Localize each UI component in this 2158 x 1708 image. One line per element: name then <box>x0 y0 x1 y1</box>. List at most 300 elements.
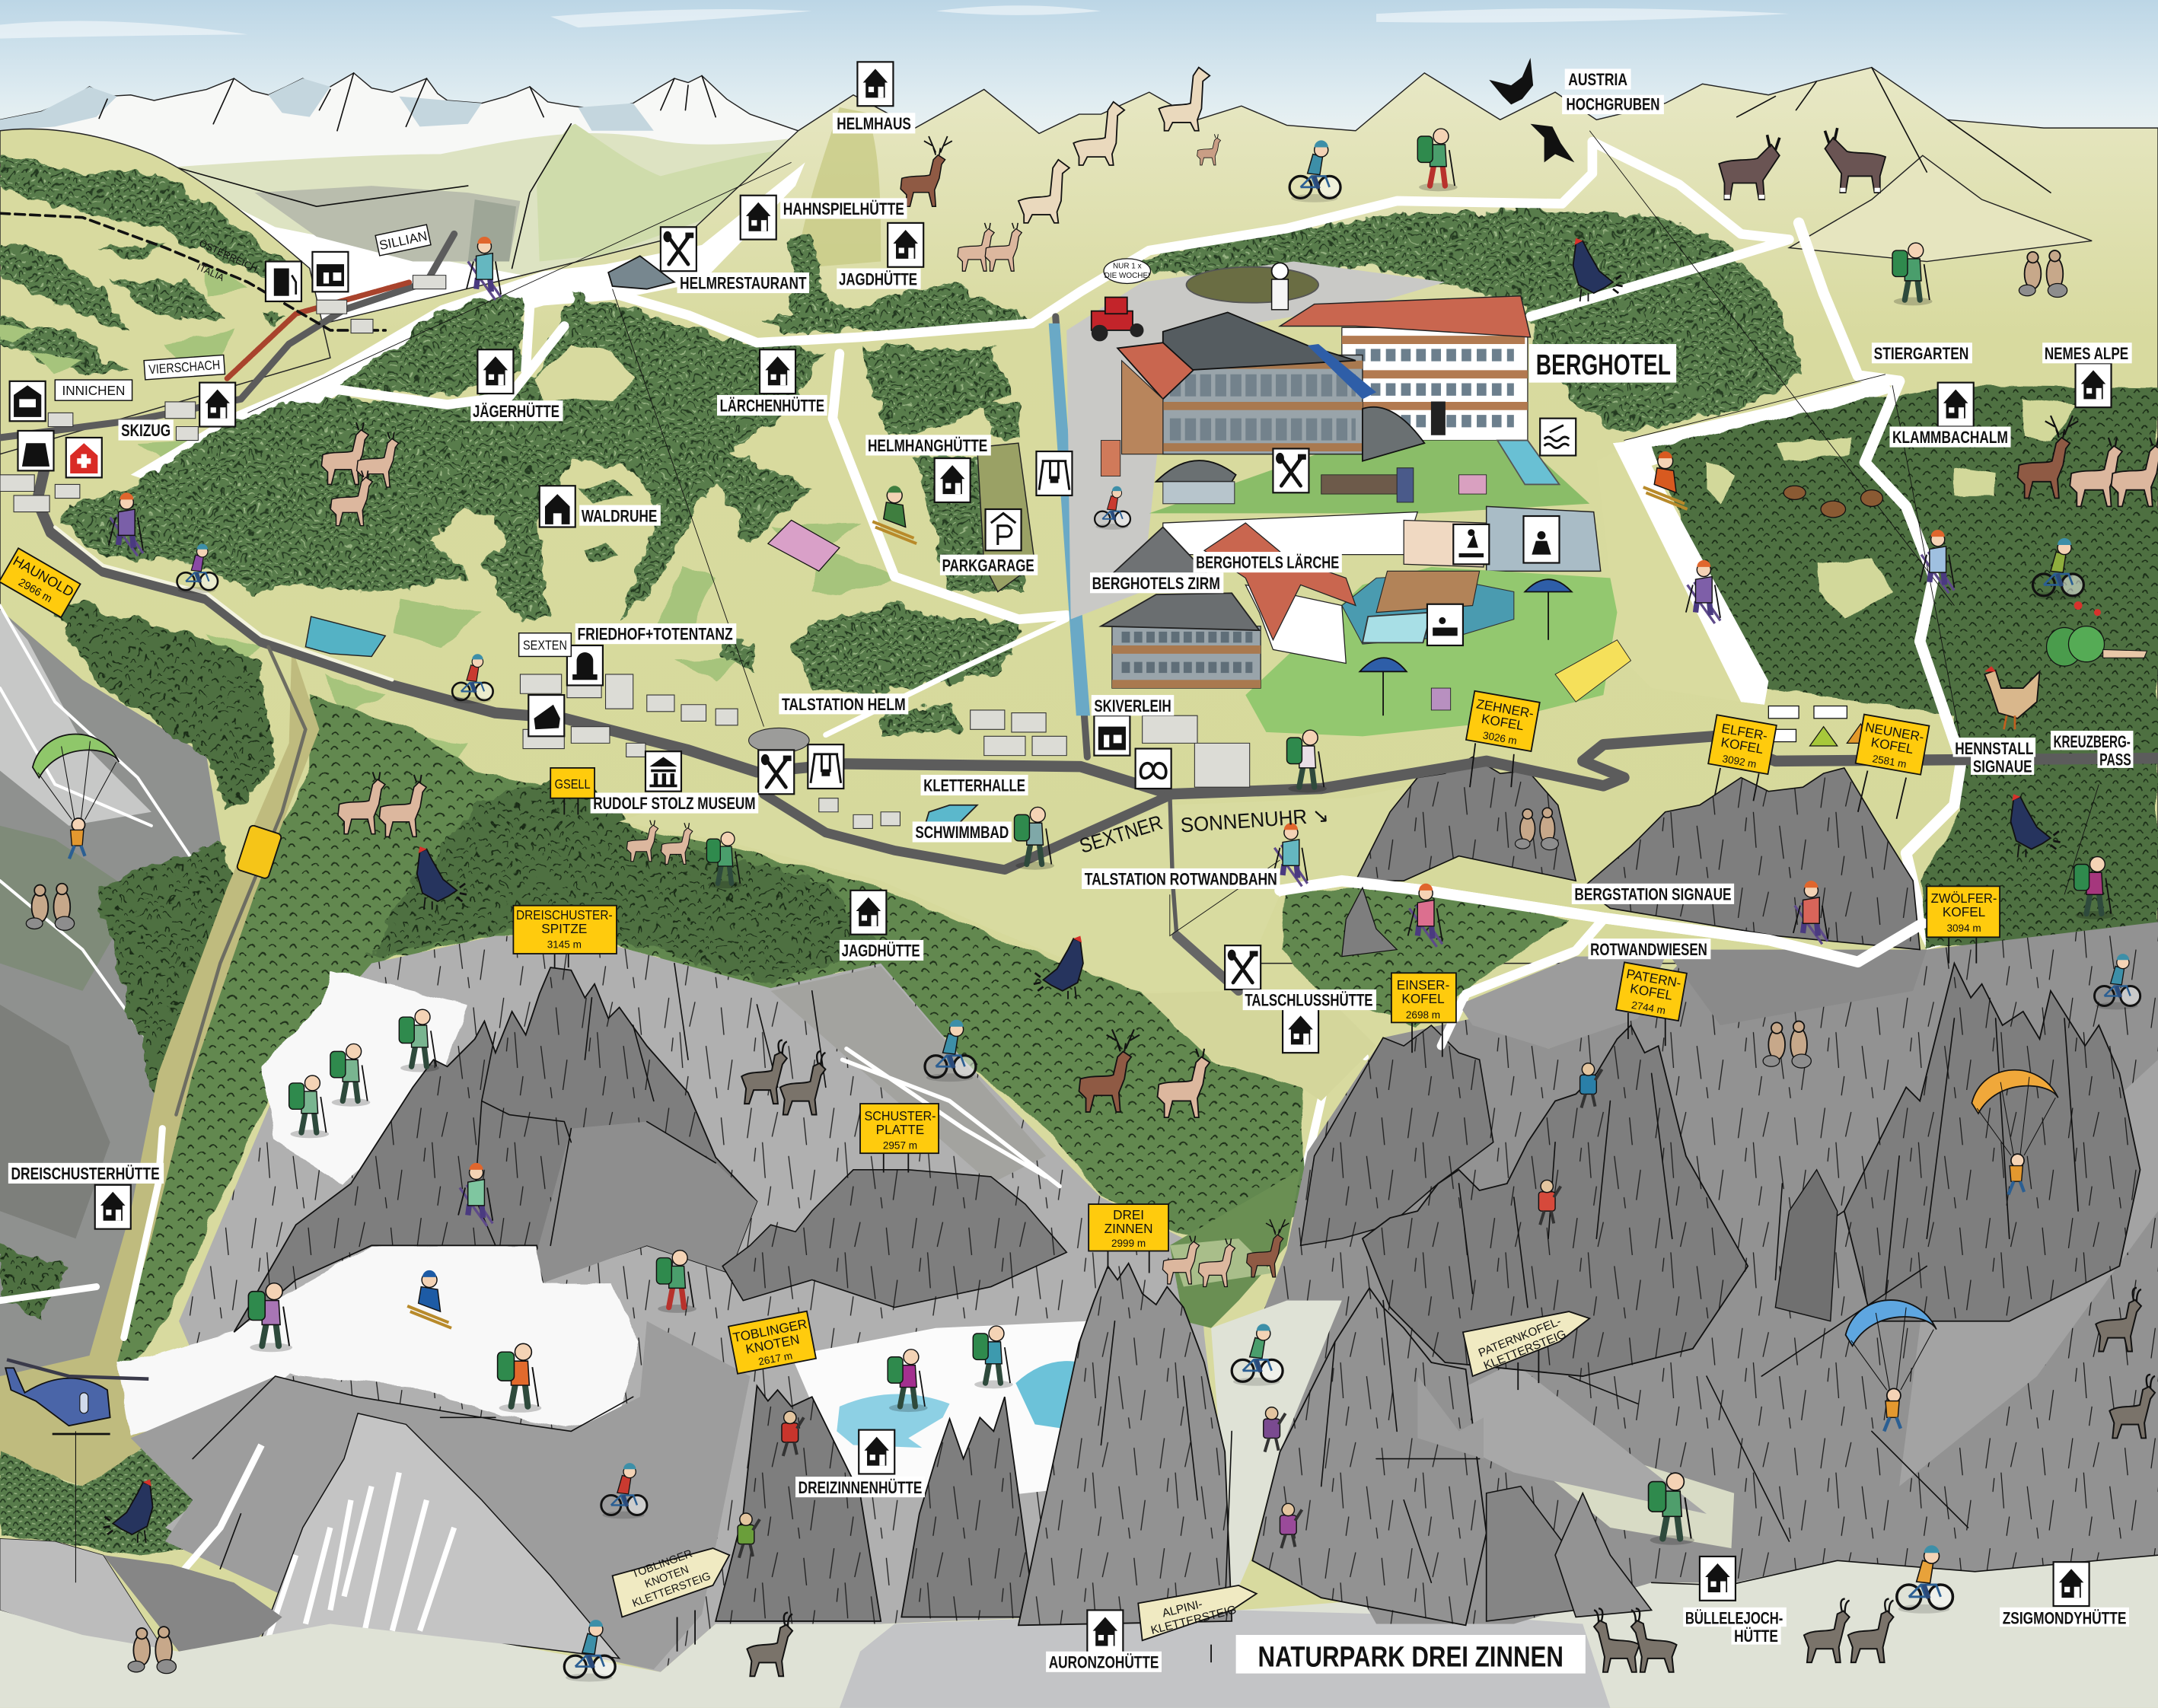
SONNENUHR: SONNENUHR ↘ <box>1180 803 1330 836</box>
hiker <box>498 1343 541 1413</box>
white trail along valley <box>0 1129 162 1337</box>
right inner hill <box>795 68 2092 269</box>
chamois 9 <box>1848 1599 1893 1662</box>
walker <box>2074 857 2114 919</box>
grave icon <box>567 645 603 685</box>
doe meadow 2 <box>661 823 693 864</box>
chamois 2 <box>780 1051 825 1115</box>
forest south-west bottom <box>0 1410 317 1555</box>
Schusterplatte: SCHUSTER- <box>864 1108 936 1123</box>
stag klammbach <box>2018 416 2078 499</box>
hotel restaurant <box>1273 448 1309 492</box>
label: TALSTATION HELM <box>782 695 906 714</box>
right rock massif <box>1238 922 2158 1624</box>
Drei Zinnen: ZINNEN <box>1105 1221 1153 1236</box>
pale gully between towers <box>1211 1301 1342 1603</box>
Zwölferkofel <box>1927 886 2000 964</box>
Talstation restaurant <box>758 750 794 794</box>
grouse east <box>2011 794 2061 857</box>
hotel pool <box>1497 441 1560 484</box>
parasol left <box>1360 658 1407 715</box>
border text Italia: ITALIA <box>195 262 226 284</box>
chamois 4 <box>2096 1288 2141 1352</box>
hiker <box>656 1251 696 1313</box>
chamois 6 <box>1594 1608 1640 1672</box>
Alpini Klettersteig: KLETTERSTEIG <box>1149 1604 1238 1637</box>
label: BÜLLELEJOCH- <box>1685 1609 1783 1628</box>
Nemes icon <box>2076 363 2112 407</box>
Büllelejoch icon <box>1700 1557 1736 1601</box>
Parkgarage building <box>977 443 1035 591</box>
Paternkofel Klettersteig: PATERNKOFEL- <box>1477 1315 1563 1360</box>
Einserkofel <box>1391 973 1456 1057</box>
label: SIGNAUE <box>1973 757 2032 776</box>
Haunold: HAUNOLD <box>11 553 76 600</box>
Elferkofel: KOFEL <box>1720 735 1764 757</box>
Drei Zinnen: DREI <box>1113 1207 1144 1222</box>
lawn terrace <box>1149 441 1589 513</box>
sauna icon <box>1523 516 1560 563</box>
wood deck <box>1376 571 1480 613</box>
re-drawn white ski run on east slope <box>1865 381 1961 853</box>
climber <box>1264 1407 1286 1452</box>
Talschluss restaurant <box>1225 945 1261 989</box>
ski rental shop icon <box>1094 715 1130 756</box>
petrol icon <box>266 262 301 301</box>
llama 1 <box>1159 68 1210 131</box>
label: ROTWANDWIESEN <box>1590 940 1707 959</box>
Paternkofel Klettersteig: KLETTERSTEIG <box>1482 1327 1568 1372</box>
pond <box>1342 575 1514 644</box>
Neunerkofel: 2581 m <box>1872 753 1908 770</box>
Zehnerkofel: 3026 m <box>1482 729 1518 747</box>
ground below horizon <box>0 950 2158 1708</box>
cyclist <box>452 654 493 703</box>
label: SCHWIMMBAD <box>915 823 1009 842</box>
label: BERGHOTELS ZIRM <box>1092 574 1220 593</box>
tan meadow east strip <box>1596 448 1741 702</box>
INNICHEN sign <box>55 380 132 400</box>
SILLIAN sign: SILLIAN <box>378 228 429 253</box>
hedge with hearts <box>2047 601 2147 666</box>
Hahnspiel icon <box>741 196 776 240</box>
doe valley 2 <box>379 775 426 836</box>
Dreischuster icon <box>95 1185 131 1229</box>
chamois 1 <box>741 1040 787 1104</box>
grouse valley <box>417 846 467 910</box>
ski run: Skizug to Helmrestaurant <box>131 162 805 482</box>
Toblinger Klettersteig: KNOTEN <box>643 1563 690 1591</box>
Paternkofel: KOFEL <box>1629 980 1674 1003</box>
climber <box>1538 1180 1560 1225</box>
NATURPARK banner: NATURPARK DREI ZINNEN <box>1258 1642 1564 1674</box>
label: TALSCHLUSSHÜTTE <box>1245 991 1373 1010</box>
Haunold <box>0 548 81 617</box>
grouse slope <box>1034 935 1083 999</box>
label: DREIZINNENHÜTTE <box>798 1478 922 1497</box>
Toblinger Klettersteig: KLETTERSTEIG <box>631 1570 712 1610</box>
forest: central Helm forest <box>62 293 826 620</box>
marmots patern <box>1763 1021 1811 1068</box>
hand-lettered place signs <box>55 225 1330 858</box>
Jägerhütte icon <box>477 349 513 394</box>
forest: upper slope behind hotel <box>1122 211 1803 434</box>
forest: valley west slope <box>0 591 276 1321</box>
Auronzo icon <box>1087 1610 1123 1654</box>
Restaurant icon <box>661 227 696 271</box>
tan valley meadow around Kletterhalle <box>620 771 1487 991</box>
Dreischusterspitze: SPITZE <box>541 921 587 936</box>
label: PARKGARAGE <box>942 556 1034 575</box>
museum icon <box>645 751 681 792</box>
Lärchenhütte icon <box>760 349 795 394</box>
Skizug house <box>199 383 235 427</box>
label: NEMES ALPE <box>2045 344 2128 363</box>
donkey left <box>1719 135 1780 199</box>
whirlpool icon <box>1427 604 1463 645</box>
garden behind hotel <box>1066 262 1445 620</box>
Zehnerkofel: ZEHNER- <box>1475 696 1535 721</box>
paraglider green <box>33 735 119 859</box>
darker forest band under Dreischuster <box>371 771 881 984</box>
label: AURONZOHÜTTE <box>1049 1652 1159 1671</box>
Lärche chalet <box>1204 523 1356 663</box>
snowfields on Dreischuster <box>117 970 640 1436</box>
peaks of right massif <box>1301 964 2140 1541</box>
cyclist <box>177 544 218 594</box>
label: RUDOLF STOLZ MUSEUM <box>593 794 756 813</box>
ski runs and trails (white) <box>337 142 2119 1260</box>
cheese icon <box>528 695 564 736</box>
doe alpe 1 <box>2070 438 2122 506</box>
red cross icon <box>66 438 102 477</box>
stag helmhaus <box>900 136 952 206</box>
doe meadow 1 <box>626 821 658 862</box>
pretzel icon <box>1136 749 1171 789</box>
skier <box>1273 823 1308 886</box>
raven <box>1531 124 1574 162</box>
Helmrestaurant building <box>608 256 674 289</box>
grouse hotel <box>1573 238 1623 301</box>
walker <box>1015 807 1054 870</box>
Schusterplatte: PLATTE <box>876 1122 924 1137</box>
Dreischusterspitze: 3145 m <box>547 939 582 951</box>
Schusterplatte: 2957 m <box>883 1140 917 1152</box>
INNICHEN sign: INNICHEN <box>62 383 125 398</box>
hiker <box>706 832 743 888</box>
cyclist <box>2032 538 2083 600</box>
tan band along valley road <box>0 647 319 1500</box>
Toblinger Knoten tower <box>716 1386 881 1621</box>
doe forest 1 <box>321 422 368 484</box>
bus <box>236 824 282 879</box>
lower central forest slope <box>104 695 1308 1376</box>
stag drei zinnen <box>1247 1219 1289 1277</box>
vegetable garden <box>1187 267 1318 303</box>
label: BERGSTATION SIGNAUE <box>1574 884 1732 903</box>
grey foreground foot, west <box>0 1538 165 1652</box>
forest along Helm road <box>763 234 1032 334</box>
walker <box>1287 730 1327 792</box>
label <box>2097 749 2133 769</box>
swing icon <box>1036 451 1072 496</box>
doe valley 1 <box>338 772 385 834</box>
label: LÄRCHENHÜTTE <box>720 397 824 416</box>
label: JAGDHÜTTE <box>839 269 917 288</box>
Toblinger Knoten <box>728 1311 816 1374</box>
Alpini Klettersteig: ALPINI- <box>1161 1598 1203 1620</box>
forest: Waldruhe tiny patches <box>578 482 633 562</box>
pale middle hills <box>158 124 798 276</box>
sky <box>0 0 2158 151</box>
sledder <box>407 1270 451 1328</box>
hiker <box>330 1044 370 1107</box>
label: AUSTRIA <box>1568 70 1627 89</box>
Paternkofel <box>1616 962 1687 1046</box>
label: KLETTERHALLE <box>923 776 1025 795</box>
label: HÜTTE <box>1734 1627 1778 1646</box>
tan strip beside Talschlusshütte <box>1143 991 1376 1101</box>
skier <box>467 237 501 300</box>
Helmhaus icon <box>857 62 893 106</box>
marmots south <box>128 1627 176 1674</box>
label: HENNSTALL <box>1955 739 2034 758</box>
Helmhang icon <box>935 458 971 502</box>
shop icon <box>312 252 348 292</box>
Toblinger Knoten: TOBLINGER <box>732 1316 808 1345</box>
Talschluss icon <box>1283 1009 1318 1053</box>
skier <box>1686 560 1720 623</box>
forest: north-west hill patches <box>0 155 296 374</box>
central rock massif <box>165 935 1225 1672</box>
Einserkofel: KOFEL <box>1401 991 1445 1006</box>
Neunerkofel: KOFEL <box>1870 735 1914 757</box>
label: FRIEDHOF+TOTENTANZ <box>577 625 733 644</box>
Dreischusterspitze: DREISCHUSTER- <box>516 907 613 923</box>
Schusterplatte <box>860 1104 939 1172</box>
label <box>717 395 827 416</box>
Gsell: GSELL <box>555 776 591 792</box>
swim icon <box>1540 419 1576 455</box>
Dreischusterspitze <box>513 906 617 967</box>
Paternkofel: PATERN- <box>1625 966 1682 990</box>
label: WALDRUHE <box>582 506 657 525</box>
cyclist <box>564 1620 615 1681</box>
Zirm building <box>1101 593 1261 688</box>
label: HAHNSPIELHÜTTE <box>783 199 904 218</box>
label: STIERGARTEN <box>1874 344 1968 363</box>
Zwölferkofel: ZWÖLFER- <box>1931 891 1997 906</box>
hiker <box>1417 129 1458 191</box>
doe pair jagdhütte <box>958 223 994 271</box>
forest meadow next to Drei Zinnen <box>1170 1170 1301 1328</box>
doe drei zinnen 2 <box>1198 1238 1235 1287</box>
yellow summit signs <box>0 548 2000 1374</box>
Jagdhütte icon <box>888 223 923 267</box>
Elferkofel <box>1708 715 1777 801</box>
doe forest 2 <box>357 432 399 487</box>
green meadow fields <box>0 262 901 785</box>
doe forest 3 <box>330 470 372 526</box>
pale valley floor bottom <box>0 1555 2158 1708</box>
skier <box>1408 884 1442 947</box>
Klammbach icon <box>1938 383 1974 427</box>
border text Österreich: ÖSTERREICH <box>198 237 260 274</box>
label: SKIZUG <box>121 421 171 440</box>
label: HELMHAUS <box>837 114 911 133</box>
massage icon <box>1453 524 1489 564</box>
lower white wing <box>1163 512 1417 555</box>
climber <box>738 1513 760 1558</box>
cyclist <box>1897 1545 1952 1614</box>
BERGHOTEL label <box>1529 344 1676 383</box>
paraglider orange <box>1972 1070 2058 1194</box>
paraglider blue <box>1846 1300 1936 1431</box>
Gsell <box>550 768 594 814</box>
Dreizinnen icon <box>859 1430 894 1474</box>
speech bubble <box>1104 259 1151 283</box>
parasol right <box>1525 579 1572 640</box>
marmots east <box>2019 250 2067 298</box>
forest below Talstation Rotwandbahn <box>1280 887 1569 1025</box>
label: TALSTATION ROTWANDBAHN <box>1085 870 1277 889</box>
chamois 8 <box>1804 1599 1850 1662</box>
grey gravel bottom centre <box>840 1610 1610 1708</box>
llama 3 <box>1018 160 1069 223</box>
label: JAGDHÜTTE <box>842 942 920 961</box>
Neunerkofel: NEUNER- <box>1864 719 1925 744</box>
llama 2 <box>1073 102 1124 165</box>
tractor <box>1092 298 1143 341</box>
doe lower <box>1158 1049 1210 1117</box>
Einserkofel: 2698 m <box>1406 1009 1440 1021</box>
Drei Zinnen: 2999 m <box>1111 1238 1146 1249</box>
Zirm grey tower roof <box>1108 527 1211 578</box>
sledder <box>1643 451 1688 509</box>
sledder <box>872 486 916 543</box>
Zwölferkofel: KOFEL <box>1943 904 1985 919</box>
SEXTEN sign: SEXTEN <box>523 637 567 652</box>
cyclist <box>1289 140 1340 202</box>
hen <box>1984 666 2040 729</box>
Haunold: 2966 m <box>16 576 54 605</box>
label: DREISCHUSTERHÜTTE <box>11 1165 160 1184</box>
marmots zehner <box>1515 808 1558 850</box>
marmots west <box>26 884 75 930</box>
skier <box>458 1163 492 1226</box>
grouse southwest <box>104 1480 153 1543</box>
Zehnerkofel <box>1466 691 1540 787</box>
cyclist <box>601 1463 647 1518</box>
helicopter <box>5 1359 148 1582</box>
hiker <box>399 1009 439 1072</box>
Toblinger Knoten: KNOTEN <box>744 1331 801 1356</box>
doe drei zinnen 1 <box>1162 1236 1200 1284</box>
Drei Zinnen <box>1089 1204 1168 1273</box>
doe second <box>985 223 1022 271</box>
main building <box>1117 312 1424 504</box>
SEXTEN sign <box>519 633 571 656</box>
lower grey slopes <box>104 1321 750 1669</box>
chef <box>1272 263 1288 310</box>
Dreischuster peak <box>234 964 826 1332</box>
BERGHOTEL label: BERGHOTEL <box>1536 349 1671 381</box>
Elferkofel: 3092 m <box>1721 753 1758 770</box>
hiker <box>1649 1473 1694 1545</box>
chapel icon <box>540 486 575 527</box>
Elferkofel: ELFER- <box>1720 720 1769 744</box>
forest: clearing above Waldruhe <box>537 344 636 402</box>
lake by Sexten <box>305 617 385 656</box>
campers <box>1768 706 1872 746</box>
skater <box>973 1326 1013 1388</box>
snow & frozen lake by Dreizinnenhütte <box>792 1321 1087 1500</box>
cyclist <box>1095 486 1130 530</box>
spa glass house <box>1404 506 1601 571</box>
VIERSCHACH sign: VIERSCHACH <box>148 357 221 377</box>
eagle <box>1489 58 1533 104</box>
valley & main roads <box>0 213 2158 1115</box>
Neunerkofel <box>1856 715 1929 819</box>
stag lower <box>1079 1029 1140 1112</box>
small tower <box>901 1397 1035 1617</box>
parking icon <box>986 509 1022 550</box>
donkey right <box>1825 128 1885 193</box>
spa pool <box>1363 613 1431 642</box>
sunbather <box>768 520 840 571</box>
label: HELMHANGHÜTTE <box>868 436 987 455</box>
skier <box>1793 881 1828 944</box>
Zehnerkofel: KOFEL <box>1481 711 1525 733</box>
cyclist <box>925 1020 976 1082</box>
east forest clearings <box>1707 399 2078 620</box>
Toblinger Knoten: 2617 m <box>757 1350 793 1368</box>
Drei Zinnen main tower <box>1018 1263 1232 1625</box>
klettersteig wooden signs <box>613 1311 1589 1662</box>
hiker <box>248 1283 292 1352</box>
hiker <box>1892 243 1932 305</box>
speech bubble: DIE WOCHE! <box>1105 272 1150 280</box>
talstation helm <box>749 728 809 753</box>
mushrooms <box>1783 486 1882 518</box>
chamois 3 <box>747 1613 792 1676</box>
back hotel facade <box>1280 296 1531 441</box>
chamois 5 <box>2109 1375 2155 1438</box>
label: SKIVERLEIH <box>1094 696 1171 715</box>
label: PASS <box>2099 750 2131 769</box>
Jagdhütte 2 icon <box>850 891 886 935</box>
hiker <box>289 1075 329 1138</box>
village Innichen and hamlets <box>0 276 446 512</box>
lift cables <box>247 131 2099 935</box>
label: KLAMMBACHALM <box>1892 428 2008 447</box>
upper grey rocks: Zehner, Elfer, Neuner <box>1280 757 1923 1049</box>
skier <box>1920 530 1954 593</box>
cloud streaks <box>0 5 1789 39</box>
label <box>1194 552 1342 572</box>
Schusterplatte ridge <box>722 1170 1066 1308</box>
Berghotel complex <box>1066 262 1617 736</box>
cyclist <box>2094 954 2140 1009</box>
Paternkofel: 2744 m <box>1630 999 1666 1016</box>
Alpini Klettersteig <box>1138 1585 1257 1662</box>
hotel guests <box>1101 402 1631 710</box>
label: BERGHOTELS LÄRCHE <box>1196 553 1339 572</box>
Paternkofel Klettersteig <box>1463 1311 1589 1390</box>
distant snow mountains <box>0 73 1039 206</box>
river along hotel <box>1049 323 1090 715</box>
doe alpe 2 <box>2112 438 2158 506</box>
